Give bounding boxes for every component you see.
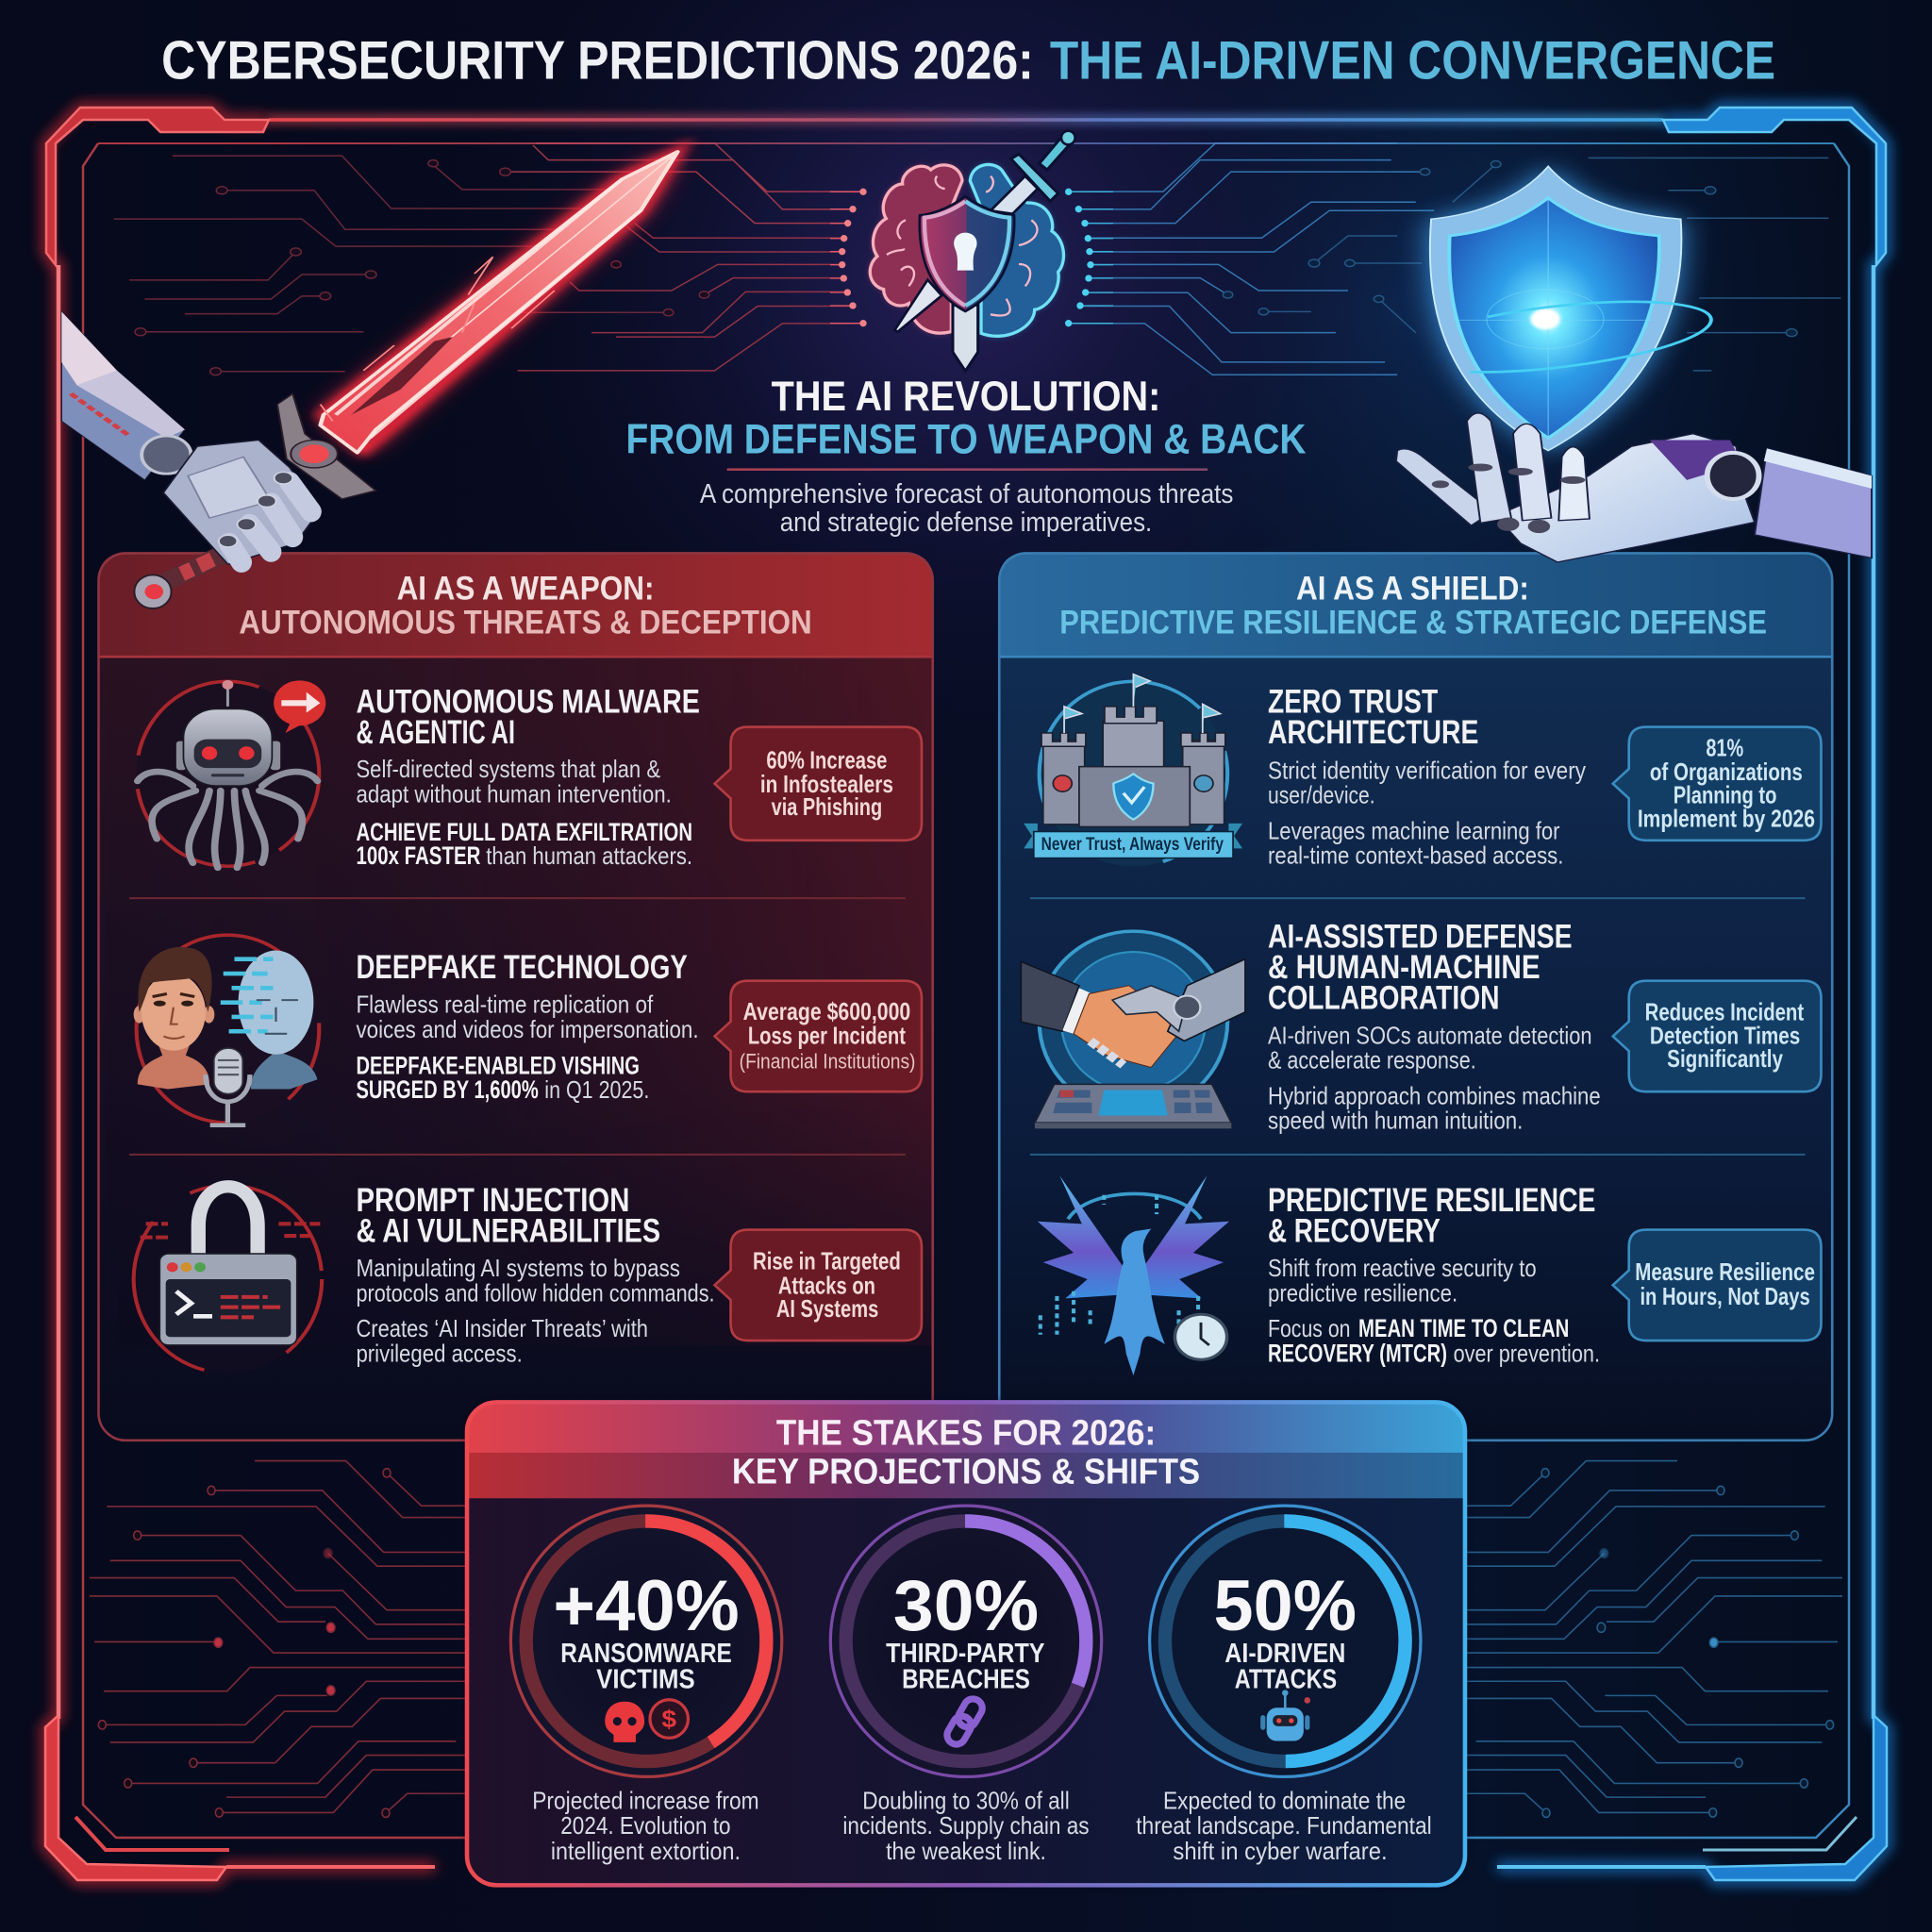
callout: infostealers: 60% Increase xyxy=(766,745,887,774)
text block: AI-assisted defense: speed with human intuition. xyxy=(1268,1106,1523,1134)
callout: zero trust adoption: Planning to xyxy=(1674,781,1776,809)
frame top lines xyxy=(98,115,1834,143)
icon: handshake console xyxy=(1021,931,1245,1128)
text block: prompt injection: protocols and follow hidden commands. xyxy=(356,1278,715,1307)
text block: predictive resilience: Shift from reactive security to xyxy=(1268,1254,1537,1282)
panel heading: shield: AI AS A SHIELD: xyxy=(1296,570,1529,607)
text block: deepfake: DEEPFAKE-ENABLED VISHING xyxy=(356,1051,640,1079)
callout: deepfake loss: (Financial Institutions) xyxy=(740,1049,915,1073)
callout: infostealers xyxy=(715,727,922,841)
text block: AI-assisted defense: AI-driven SOCs automate detection xyxy=(1268,1021,1592,1049)
robot arm xyxy=(61,311,191,480)
stat: ransomware victims: +40% xyxy=(553,1566,740,1646)
stat: third-party breaches: 30% xyxy=(893,1566,1039,1646)
icon: robot octopus xyxy=(137,680,325,868)
text block: deepfake: DEEPFAKE TECHNOLOGY xyxy=(356,949,688,986)
callout: targeted attacks xyxy=(715,1230,922,1341)
right row icons xyxy=(1021,675,1245,1375)
callout: resilience measure: in Hours, Not Days xyxy=(1640,1282,1810,1310)
callout: targeted attacks: Rise in Targeted xyxy=(753,1246,901,1274)
heading: the AI revolution xyxy=(626,374,1306,470)
callout: detection times: Reduces Incident xyxy=(1645,997,1804,1025)
icon: glowing blue shield xyxy=(1393,166,1719,451)
text block: zero trust: ZERO TRUST xyxy=(1268,684,1439,721)
circuit traces: top left xyxy=(114,143,862,375)
text block: ransomware description: intelligent extortion. xyxy=(551,1837,741,1865)
callout: targeted attacks: AI Systems xyxy=(776,1294,878,1323)
stat: AI-driven attacks xyxy=(1150,1506,1421,1776)
callout: zero trust adoption xyxy=(1613,727,1821,841)
text block: zero trust: user/device. xyxy=(1268,781,1375,809)
stat: AI-driven attacks: AI-DRIVEN xyxy=(1224,1639,1345,1669)
icon: robotic arm with red sword xyxy=(61,152,677,608)
callout: zero trust adoption: 81% xyxy=(1706,733,1743,761)
heading: the AI revolution: FROM DEFENSE TO WEAPON & BACK xyxy=(626,417,1306,463)
stat: ransomware victims: RANSOMWARE xyxy=(560,1639,732,1669)
subtitle: and strategic defense imperatives. xyxy=(780,508,1152,538)
text block: zero trust: ARCHITECTURE xyxy=(1268,714,1478,751)
left row icons xyxy=(134,680,325,1374)
text block: predictive resilience xyxy=(1268,1182,1600,1367)
stat: third-party breaches xyxy=(830,1506,1102,1776)
text block: deepfake: in Q1 2025. xyxy=(544,1075,649,1104)
text block: attacks description: threat landscape. Fundamental xyxy=(1136,1811,1432,1840)
icon: sword glow xyxy=(324,152,677,451)
text block: prompt injection: & AI VULNERABILITIES xyxy=(356,1213,660,1250)
callout: infostealers: via Phishing xyxy=(772,792,882,821)
red frame bracket xyxy=(45,108,472,1880)
text block: zero trust: Strict identity verification for every xyxy=(1268,756,1586,784)
panel heading: shield xyxy=(1059,570,1767,641)
text block: AI-assisted defense: AI-ASSISTED DEFENSE xyxy=(1268,918,1573,955)
callout: detection times: Significantly xyxy=(1667,1044,1783,1073)
icon: terminal padlock xyxy=(134,1186,322,1374)
stakes heading: KEY PROJECTIONS & SHIFTS xyxy=(732,1453,1200,1492)
callout: infostealers: in Infostealers xyxy=(760,770,893,798)
text block: deepfake: voices and videos for impersonation. xyxy=(356,1015,699,1043)
text block: predictive resilience: Focus on xyxy=(1268,1314,1351,1342)
red frame corner glow xyxy=(45,108,435,1880)
text block: AI-assisted defense: COLLABORATION xyxy=(1268,980,1500,1017)
panel heading: weapon: AI AS A WEAPON: xyxy=(397,570,655,607)
icon: broken chain xyxy=(943,1695,986,1748)
text block: prompt injection: PROMPT INJECTION xyxy=(356,1182,629,1219)
text block: breaches description xyxy=(842,1786,1090,1865)
stakes heading: THE STAKES FOR 2026: xyxy=(776,1413,1156,1453)
icon: phoenix with clock xyxy=(1038,1175,1229,1375)
text block: zero trust: real-time context-based access. xyxy=(1268,841,1563,870)
icon: brain, shield and sword emblem xyxy=(830,131,1113,371)
icon: dollar coin xyxy=(650,1700,688,1738)
text block: predictive resilience: over prevention. xyxy=(1454,1339,1600,1367)
subtitle xyxy=(700,479,1233,538)
text block: breaches description: incidents. Supply chain as xyxy=(842,1811,1090,1840)
callout: detection times: Detection Times xyxy=(1650,1021,1800,1049)
text block: autonomous malware: ACHIEVE FULL DATA EXFILTRATION xyxy=(356,818,692,846)
icon: robotic hand holding the shield xyxy=(1396,413,1872,562)
text block: deepfake: Flawless real-time replication of xyxy=(356,991,654,1019)
stat: third-party breaches: BREACHES xyxy=(902,1664,1030,1694)
text block: deepfake xyxy=(356,949,699,1104)
title: THE AI-DRIVEN CONVERGENCE xyxy=(1050,31,1775,92)
circuit traces: bottom left xyxy=(90,1461,465,1817)
text block: autonomous malware: 100x FASTER xyxy=(356,841,480,870)
callout: deepfake loss: Loss per Incident xyxy=(748,1021,906,1049)
text block: autonomous malware: than human attackers. xyxy=(486,841,692,870)
callout: targeted attacks: Attacks on xyxy=(778,1271,875,1299)
text block: prompt injection xyxy=(356,1182,715,1367)
text block: AI-assisted defense xyxy=(1268,918,1601,1134)
callout: zero trust adoption: Implement by 2026 xyxy=(1638,804,1815,832)
text block: breaches description: the weakest link. xyxy=(886,1837,1046,1865)
text block: autonomous malware: & AGENTIC AI xyxy=(356,714,515,751)
text block: autonomous malware xyxy=(356,684,700,870)
text block: zero trust xyxy=(1268,684,1586,870)
text block: deepfake: SURGED BY 1,600% xyxy=(356,1075,539,1104)
icon: skull xyxy=(605,1702,644,1742)
circuit traces: top right xyxy=(1068,143,1840,375)
callout: detection times xyxy=(1613,981,1821,1091)
stat: ransomware victims: VICTIMS xyxy=(596,1664,695,1694)
text block: attacks description: shift in cyber warfare. xyxy=(1173,1837,1388,1865)
icon: deepfake faces xyxy=(134,935,319,1125)
castle banner text: Never Trust, Always Verify xyxy=(1041,834,1224,855)
stakes heading xyxy=(732,1413,1200,1492)
stat: AI-driven attacks: 50% xyxy=(1214,1566,1357,1646)
text block: predictive resilience: predictive resilience. xyxy=(1268,1278,1457,1307)
text block: predictive resilience: & RECOVERY xyxy=(1268,1213,1441,1250)
text block: ransomware description: 2024. Evolution to xyxy=(560,1811,731,1840)
text block: prompt injection: Creates ‘AI Insider Threats’ with xyxy=(356,1314,648,1342)
text block: breaches description: Doubling to 30% of all xyxy=(862,1786,1070,1814)
circuit traces: bottom right xyxy=(1467,1461,1842,1817)
blue frame corner glow xyxy=(1497,108,1887,1880)
blue frame bracket xyxy=(1460,108,1887,1880)
text block: AI-assisted defense: Hybrid approach combines machine xyxy=(1268,1081,1601,1109)
icon: robot head xyxy=(1260,1690,1310,1741)
heading: the AI revolution: THE AI REVOLUTION: xyxy=(772,374,1160,420)
panel heading: weapon: AUTONOMOUS THREATS & DECEPTION xyxy=(239,604,812,641)
sword handle xyxy=(134,547,237,608)
text block: attacks description xyxy=(1136,1786,1432,1865)
callout: deepfake loss xyxy=(715,981,922,1091)
text block: autonomous malware: Self-directed systems that plan & xyxy=(356,755,660,783)
panel: AI as a weapon xyxy=(98,553,933,1441)
text block: ransomware description xyxy=(532,1786,759,1865)
robot hand xyxy=(163,440,321,564)
text block: zero trust: Leverages machine learning for xyxy=(1268,816,1560,844)
main content layer xyxy=(98,31,1832,1441)
text block: prompt injection: Manipulating AI systems to bypass xyxy=(356,1254,680,1282)
callout: deepfake loss: Average $600,000 xyxy=(743,997,910,1025)
text block: AI-assisted defense: & HUMAN-MACHINE xyxy=(1268,949,1541,986)
text block: autonomous malware: adapt without human intervention. xyxy=(356,779,672,808)
callout: resilience measure: Measure Resilience xyxy=(1635,1257,1815,1286)
text block: AI-assisted defense: & accelerate response. xyxy=(1268,1045,1476,1074)
stat: ransomware victims xyxy=(510,1506,782,1776)
stat: third-party breaches: THIRD-PARTY xyxy=(886,1639,1045,1669)
sword blade xyxy=(321,152,677,453)
panel: the stakes for 2026 xyxy=(467,1402,1465,1885)
title: CYBERSECURITY PREDICTIONS 2026: xyxy=(161,31,1034,92)
text block: ransomware description: Projected increase from xyxy=(532,1786,759,1814)
icon: zero trust castle xyxy=(1024,675,1242,866)
text block: predictive resilience: MEAN TIME TO CLEAN xyxy=(1358,1314,1569,1342)
title xyxy=(161,31,1775,92)
panel heading: shield: PREDICTIVE RESILIENCE & STRATEGIC DEFENSE xyxy=(1059,604,1767,641)
text block: attacks description: Expected to dominate the xyxy=(1163,1786,1406,1814)
text block: prompt injection: privileged access. xyxy=(356,1339,523,1367)
callout: zero trust adoption: of Organizations xyxy=(1650,758,1803,786)
callout: resilience measure xyxy=(1613,1230,1821,1341)
text block: predictive resilience: PREDICTIVE RESILIENCE xyxy=(1268,1182,1595,1219)
panel: AI as a shield xyxy=(999,553,1832,1441)
subtitle: A comprehensive forecast of autonomous threats xyxy=(700,479,1233,509)
sword guard xyxy=(277,393,375,499)
icon: dollar coin: $ xyxy=(661,1705,677,1733)
text block: predictive resilience: RECOVERY (MTCR) xyxy=(1268,1339,1447,1367)
stat: AI-driven attacks: ATTACKS xyxy=(1235,1664,1337,1694)
panel heading: weapon xyxy=(239,570,812,641)
text block: autonomous malware: AUTONOMOUS MALWARE xyxy=(356,684,700,721)
